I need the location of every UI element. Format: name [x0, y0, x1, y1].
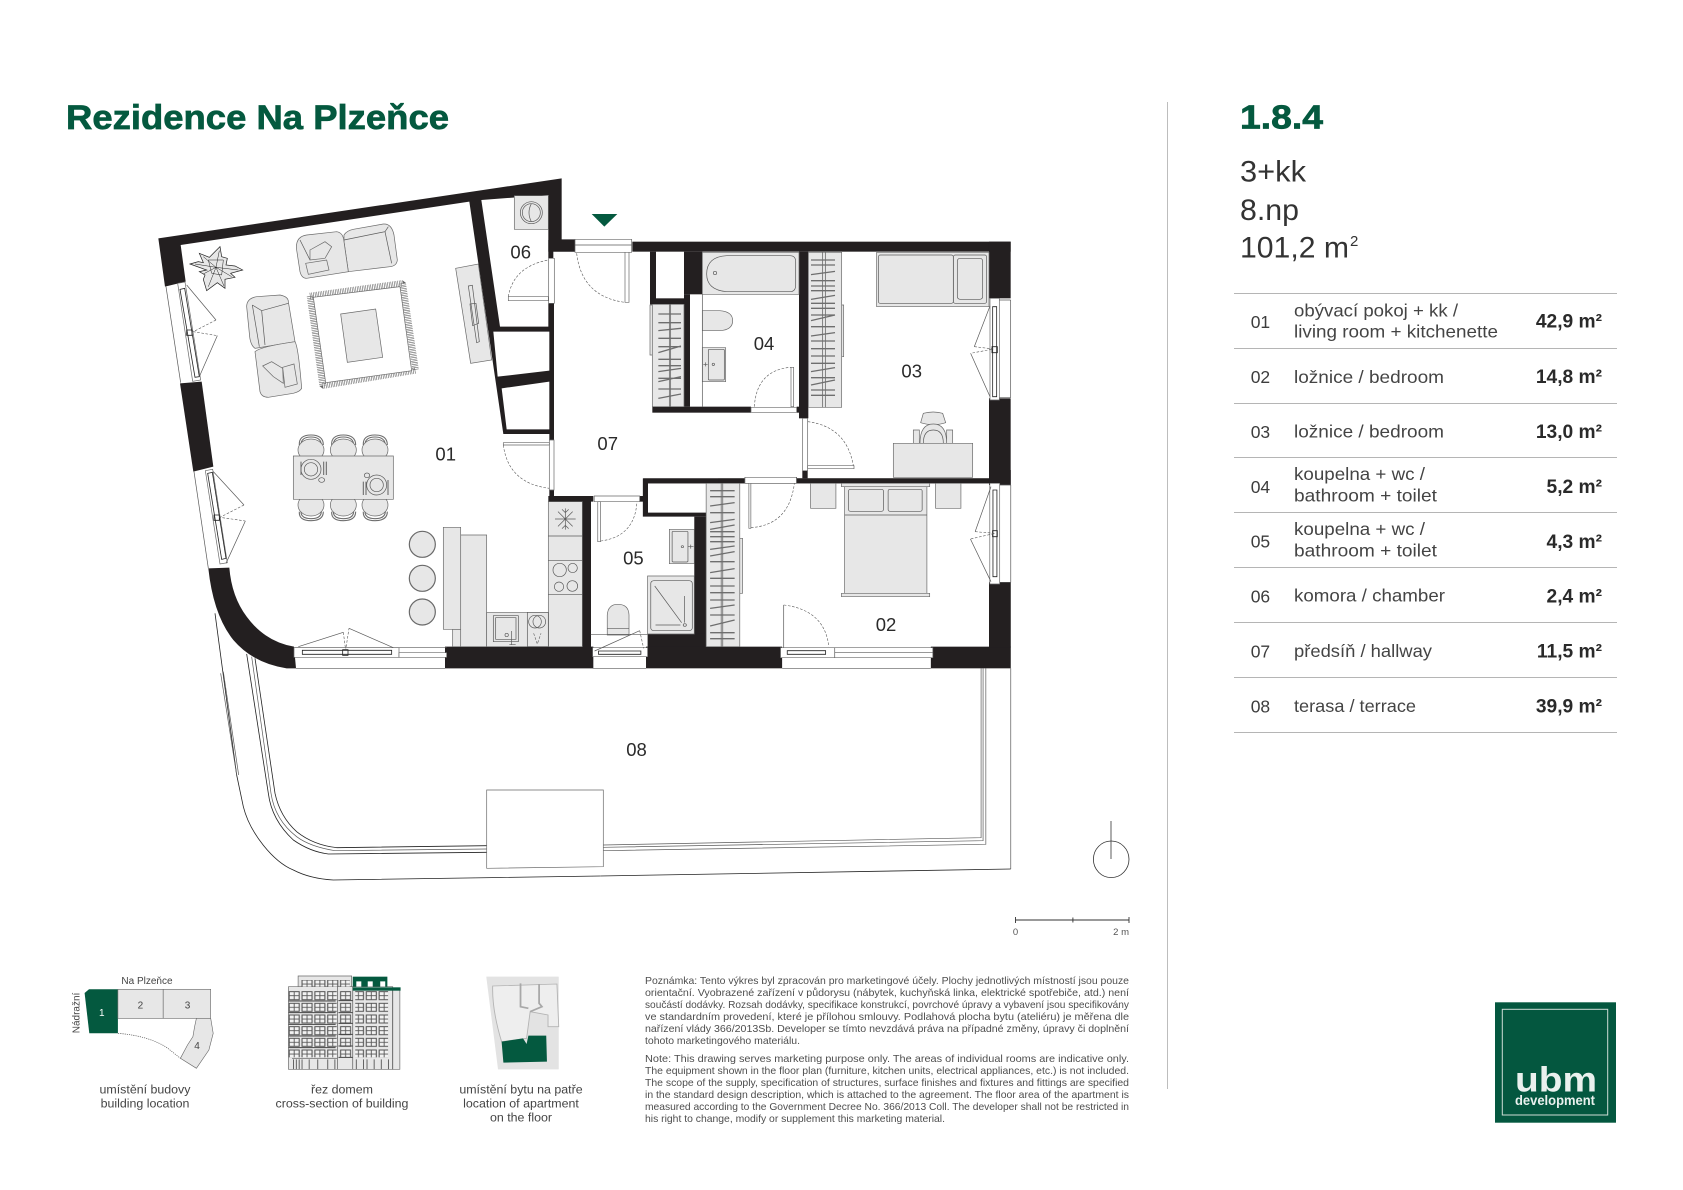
logo: ubm development: ubm: [1515, 1061, 1597, 1100]
caption: cross-section: cross-section of building: [276, 1096, 409, 1110]
coffee table: [341, 309, 383, 362]
site map: building location: 2: [138, 1000, 144, 1012]
entrance door: [575, 239, 632, 302]
scale bar: 2 m: [1113, 927, 1129, 938]
window bedroom 03: [971, 298, 1011, 400]
row 08: 39,9 m²: [1536, 696, 1602, 718]
window door 05: [593, 631, 648, 668]
note: English: The scope of the supply, specification of structures, surface finishes and fixtures and fittings are specified: [645, 1078, 1129, 1089]
row 01: 42,9 m²: [1536, 312, 1602, 332]
row 03: ložnice / bedroom: [1294, 422, 1444, 442]
wardrobe bedroom 02: [706, 483, 743, 647]
room numbers: 01: [435, 444, 456, 465]
windows and balcony doors of living room: [166, 282, 447, 668]
toilet 05: [591, 604, 648, 635]
note: English: Note: This drawing serves marketing purpose only. The areas of individual rooms are indicative only.: [645, 1054, 1129, 1065]
note: Czech: nařízení vlády 366/2013Sb. Developer se tímto nevzdává práva na případné změny, úpravy či doplnění: [645, 1024, 1129, 1035]
site map: building location: 1: [99, 1008, 105, 1019]
note: English: [645, 1054, 1129, 1125]
interior doors west: [503, 258, 554, 490]
room numbers: 07: [597, 433, 618, 454]
sofa top: [296, 224, 397, 278]
washbasin 04: [702, 348, 726, 382]
note: English: his right to change, modify or supplement this marketing material.: [645, 1114, 945, 1125]
row 01: living room + kitchenette: [1294, 322, 1498, 342]
site map: building location: 3: [185, 1000, 191, 1012]
scale bar: 0: [1013, 927, 1018, 938]
row 06: 2,4 m²: [1547, 587, 1602, 608]
icon: plant: [190, 247, 243, 291]
row 07: 11,5 m²: [1537, 642, 1602, 662]
dining set: [293, 435, 393, 521]
sofa left: [247, 295, 302, 397]
row 08: 08: [1251, 696, 1270, 716]
logo: ubm development: [1495, 1002, 1616, 1123]
apartment summary: 2: [1350, 233, 1358, 250]
row 05: koupelna + wc /: [1294, 519, 1425, 539]
row 07: [1251, 641, 1602, 662]
row 08: [1251, 696, 1602, 718]
note: Czech: ve standardním provedení, které je přílohou smlouvy. Podlahová plocha bytu (ateliéru) je měřena dle: [645, 1012, 1129, 1023]
entrance and hallway, bathroom 04, bedroom 03: [575, 214, 1011, 483]
living room furniture: [190, 196, 548, 521]
caption: floor location: umístění bytu na patře: [459, 1082, 583, 1096]
row 05: 4,3 m²: [1547, 532, 1602, 553]
note: Czech: [645, 976, 1130, 1047]
door 04: [751, 367, 797, 412]
row 07: předsíň / hallway: [1294, 641, 1432, 661]
row 03: 03: [1251, 422, 1270, 442]
window bedroom 02: [970, 483, 1011, 584]
kitchen: [409, 502, 582, 647]
site map: building location: [72, 976, 213, 1068]
room numbers: [435, 241, 922, 760]
terrace outline and railing: [215, 613, 1011, 880]
scale bar: [1013, 917, 1129, 938]
caption: floor location: location of apartment: [463, 1096, 579, 1110]
room table: [1234, 294, 1617, 732]
note: Czech: součástí dodávky. Rozsah dodávky, specifikace konstrukcí, povrchové úpravy a vybavení jsou specifikovány: [645, 1000, 1130, 1011]
floor plan: [158, 178, 1011, 880]
row 06: [1251, 586, 1602, 608]
bed 03: [877, 252, 989, 307]
bathroom 05 and bedroom 02: [591, 477, 1011, 668]
apartment number: 1.8.4: [1240, 99, 1323, 136]
note: English: in the standard design description, which is attached to the agreement. The floor area of the apartment is: [645, 1090, 1129, 1101]
note: Czech: orientační. Vyobrazené zařízení v půdorysu (nábytek, kuchyňská linka, elektrické spotřebiče, atd.) není: [645, 987, 1129, 999]
note: Czech: Poznámka: Tento výkres byl zpracován pro marketingové účely. Plochy jednotlivých místností jsou pouze: [645, 976, 1129, 987]
icon: north arrow: [1093, 821, 1129, 878]
kitchen island: [443, 527, 487, 647]
site map: building location: 4: [194, 1041, 200, 1052]
row 01: [1251, 301, 1602, 342]
row 05: [1251, 519, 1602, 561]
row 01: 01: [1251, 312, 1270, 332]
apartment summary: 101,2 m: [1240, 232, 1349, 265]
row 06: 06: [1251, 586, 1270, 606]
row 04: bathroom + toilet: [1294, 486, 1437, 506]
row 04: 5,2 m²: [1547, 477, 1602, 498]
title: Rezidence Na Plzeňce: [66, 99, 449, 137]
bath: [702, 252, 799, 294]
row 08: terasa / terrace: [1294, 696, 1416, 716]
washbasin 05: [669, 529, 694, 564]
room numbers: 08: [626, 739, 647, 760]
cross-section of building: [288, 976, 401, 1069]
row 04: koupelna + wc /: [1294, 464, 1425, 484]
caption: building location: [100, 1082, 191, 1110]
walls: [158, 178, 1011, 668]
caption: floor location: [459, 1082, 583, 1125]
caption: cross-section: řez domem: [311, 1082, 373, 1096]
washer in chamber: [514, 196, 548, 229]
row 02: ložnice / bedroom: [1294, 367, 1444, 387]
wardrobe hallway: [650, 304, 684, 407]
toilet 04: [702, 311, 733, 331]
floor location map: [486, 977, 559, 1069]
note: English: The equipment shown in the floor plan (furniture, kitchen units, electrical appliances, etc.) is not included.: [645, 1066, 1129, 1077]
caption: building location: building location: [101, 1096, 190, 1110]
desk and chair: [893, 412, 973, 477]
row 03: [1251, 422, 1602, 443]
rug with fringe: [310, 283, 416, 386]
row 05: 05: [1251, 532, 1270, 552]
room numbers: 03: [901, 361, 922, 382]
bed 02: [841, 483, 930, 597]
row 02: 14,8 m²: [1536, 367, 1602, 388]
TV console: [456, 264, 492, 363]
apartment summary: 3+kk: [1240, 156, 1307, 189]
row 02: 02: [1251, 367, 1270, 387]
nightstands: [811, 483, 961, 508]
apartment summary: [1240, 156, 1358, 265]
row 02: [1251, 367, 1602, 388]
row 06: komora / chamber: [1294, 586, 1445, 606]
wardrobe bedroom 03: [808, 252, 844, 407]
caption: floor location: on the floor: [490, 1111, 552, 1125]
room numbers: 05: [623, 547, 644, 568]
counter with appliances: [487, 502, 582, 647]
site map: building location: Nádražní: [72, 992, 82, 1033]
caption: building location: umístění budovy: [100, 1082, 191, 1096]
apartment summary: 8.np: [1240, 194, 1299, 227]
shower: [648, 576, 694, 634]
row 04: 04: [1251, 477, 1270, 497]
row 03: 13,0 m²: [1536, 422, 1602, 443]
door frame bedroom 02 hallway: [745, 477, 797, 483]
room numbers: 02: [876, 614, 896, 635]
row 05: bathroom + toilet: [1294, 541, 1437, 561]
door 03: [803, 418, 854, 471]
entrance arrow: [592, 214, 617, 227]
note: Czech: tohoto marketingového materiálu.: [645, 1036, 800, 1047]
door 02: [745, 477, 796, 528]
row 07: 07: [1251, 642, 1270, 662]
row 04: [1251, 464, 1602, 506]
row 01: obývací pokoj + kk /: [1294, 301, 1458, 321]
caption: cross-section: [276, 1082, 409, 1110]
bar stools: [409, 531, 435, 625]
door 05: [594, 496, 640, 542]
logo: ubm development: development: [1515, 1093, 1595, 1108]
site map: building location: Na Plzeňce: [121, 976, 173, 987]
room numbers: 04: [754, 333, 774, 354]
note: English: measured according to the Government Decree No. 366/2013 Coll. The developer shall not be restricted in: [645, 1102, 1129, 1113]
window door bedroom 02: [781, 605, 933, 668]
room numbers: 06: [510, 241, 531, 262]
